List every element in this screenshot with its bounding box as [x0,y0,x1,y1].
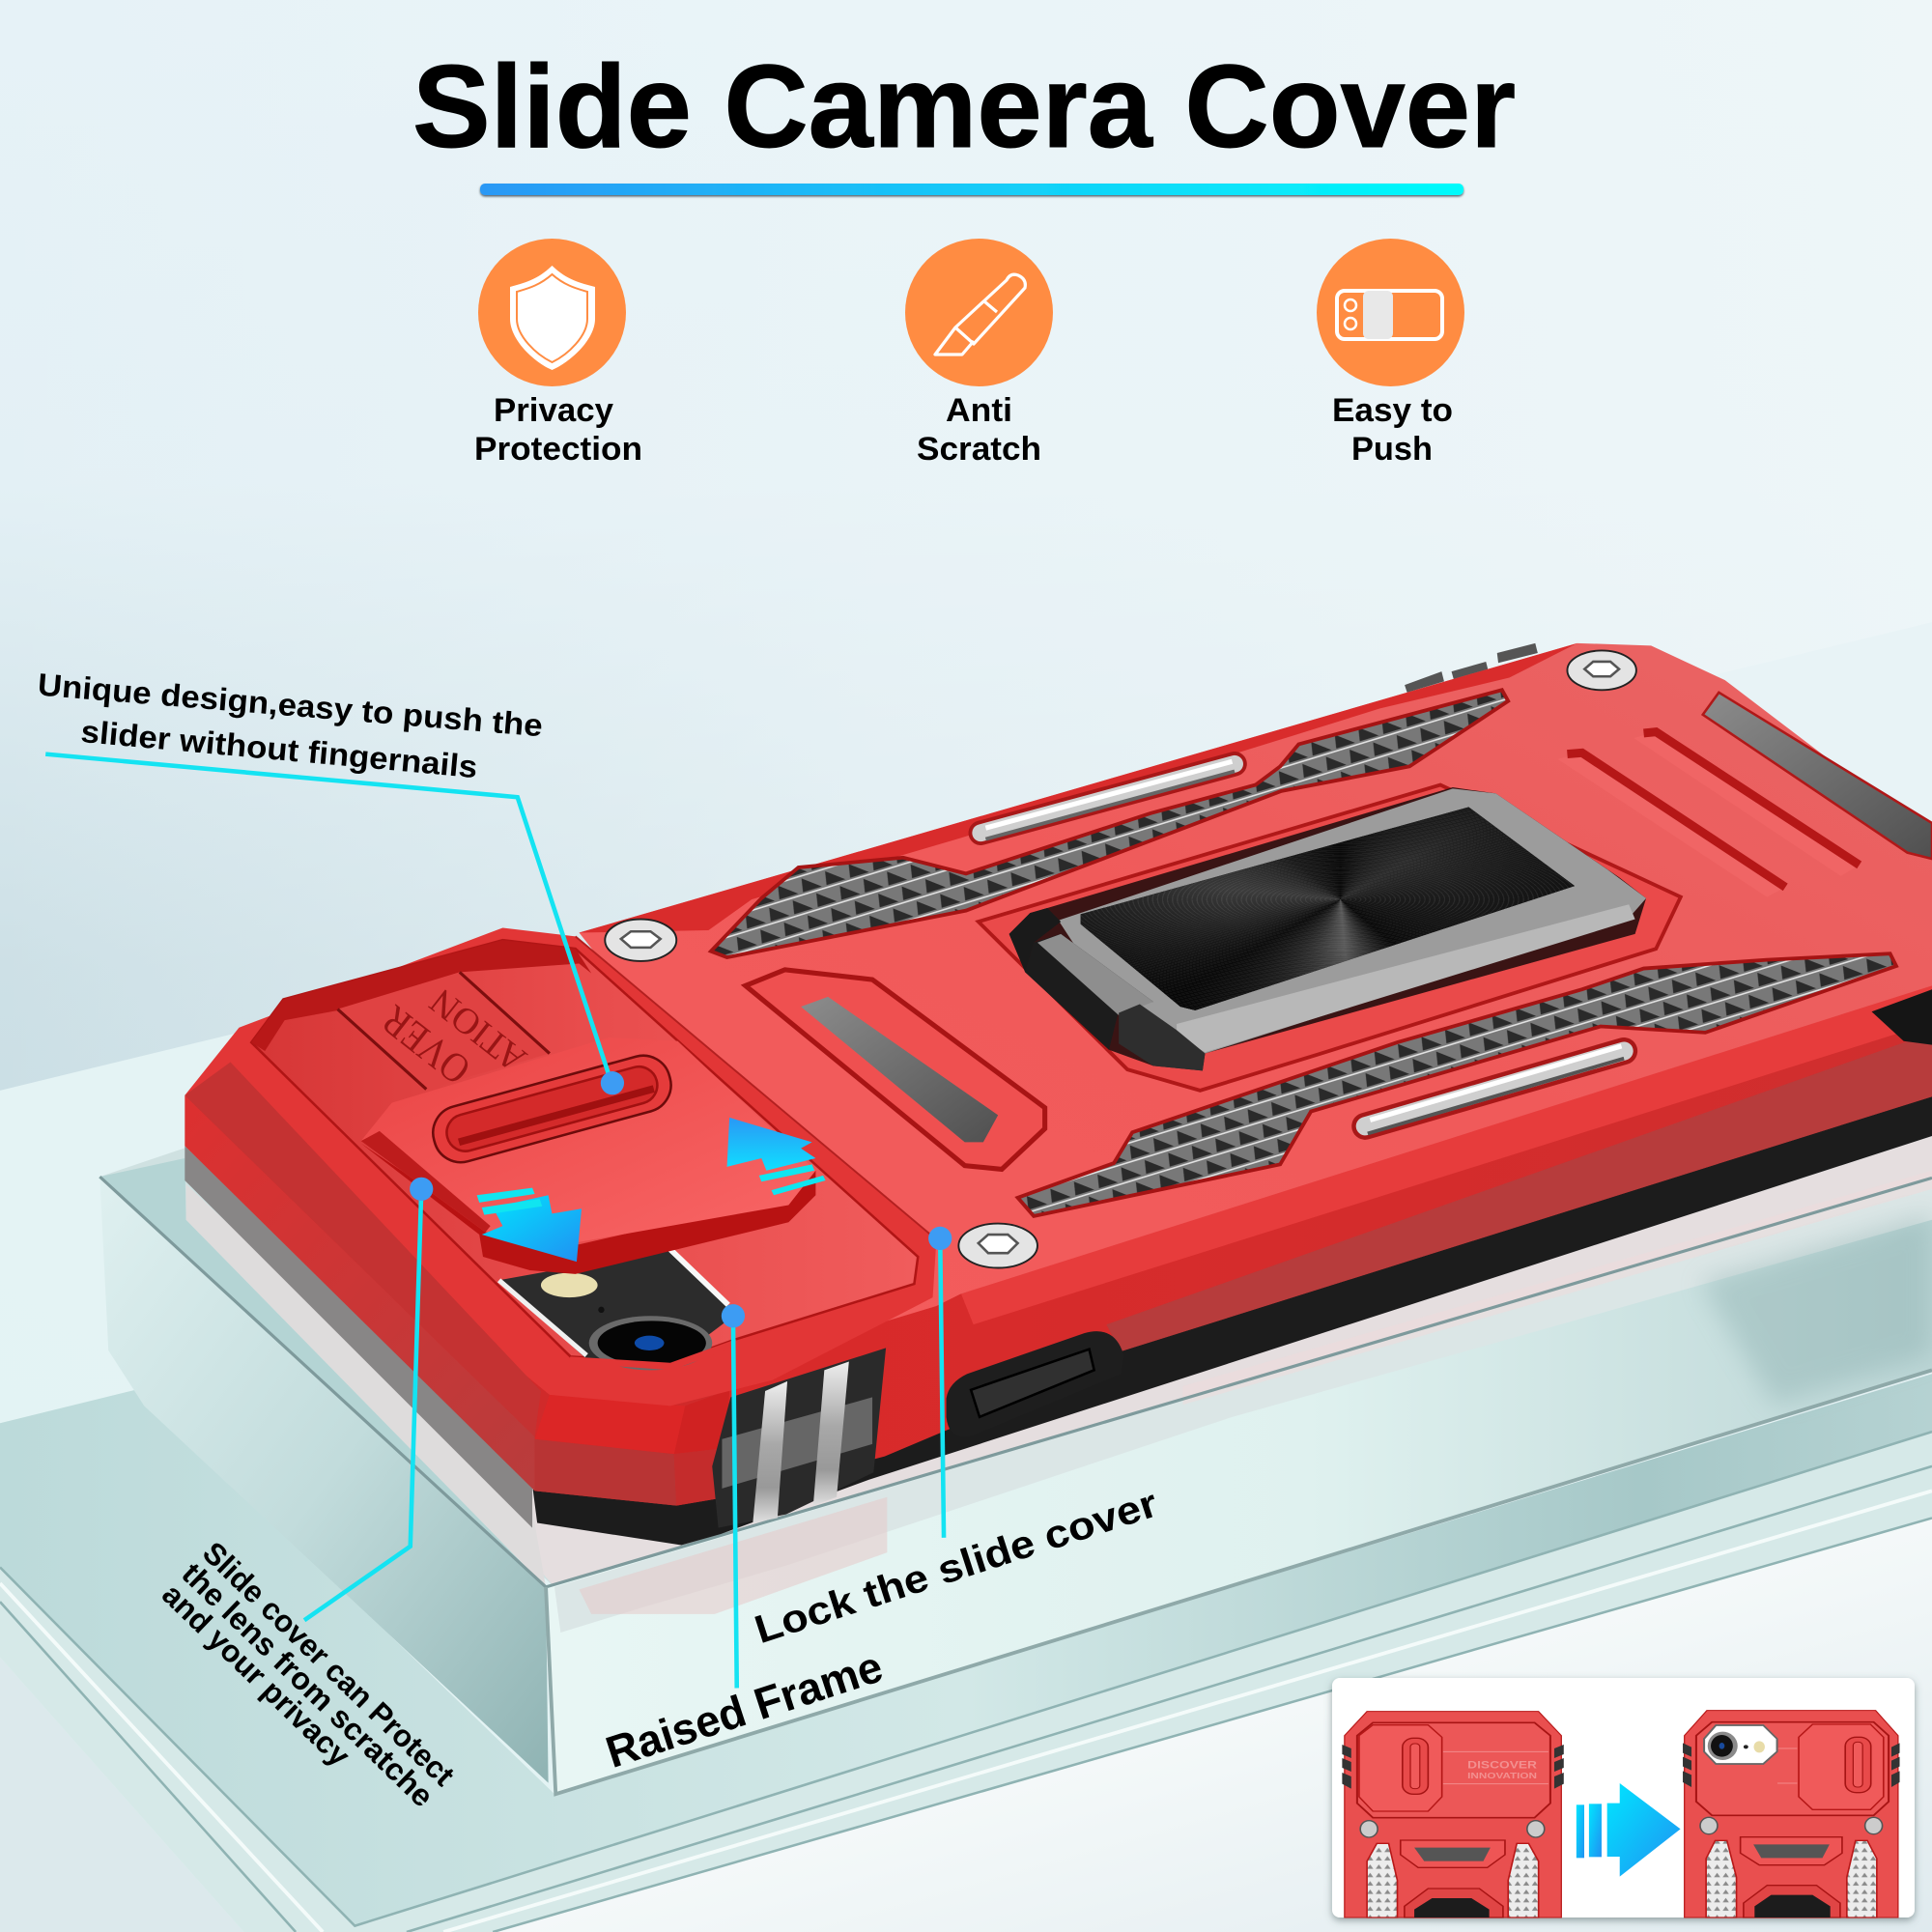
label: privacy protection: Privacy [494,392,613,429]
top right slots [1557,732,1860,897]
inset phone: cover closed [1342,1712,1564,1918]
label: easy to push: Easy to [1332,392,1453,429]
feature: privacy protection [474,239,642,468]
top right pad [1703,693,1932,859]
rear port block [712,1348,886,1528]
text: protect lens: Slide cover can Protect [196,1535,462,1793]
camera window [499,1249,739,1370]
frame slope band [185,1062,541,1436]
text: raised frame: Raised Frame [600,1641,889,1777]
callout dots [410,1071,952,1327]
underside: grey and black [185,1094,1932,1545]
upper edge shade [579,643,1577,933]
feature: anti scratch [905,239,1053,468]
darker side strip [1106,1033,1932,1351]
title: Slide Camera Cover [412,41,1516,172]
camera frame [185,927,936,1406]
side cutout [1871,989,1932,1045]
text: lock the slide cover: Lock the slide cover [750,1481,1163,1652]
ring holder [1009,787,1646,1070]
grip: upper [711,690,1508,957]
phone reflection strip [186,1184,546,1587]
text: push slider: slider without fingernails [79,714,479,784]
inset phone: cover open [1683,1711,1900,1918]
label: anti scratch: Scratch [917,431,1041,468]
inset phone: cover closed: DISCOVER [1467,1759,1537,1771]
leader: slider [45,754,610,1078]
feature: easy to push [1317,239,1464,468]
callout labels [37,667,1163,1813]
embossed tile: ATION [422,980,534,1080]
grip: lower [1018,953,1896,1216]
left slot [746,970,1045,1169]
top surface [579,643,1932,1321]
embossed tile [337,972,550,1094]
ring recess [979,784,1681,1091]
arrow: slide down [477,1188,582,1262]
lower edge highlight [961,985,1932,1324]
block front face [549,1178,1932,1794]
text: protect lens: the lens from scratche [175,1556,440,1813]
lower plate surface [0,1374,1932,1926]
scene: glass plates [0,622,1932,1932]
text: push slider: Unique design,easy to push the [37,667,544,743]
charging port [947,1331,1123,1436]
callout lines [45,754,944,1688]
icon: slider [1317,239,1464,386]
label: anti scratch: Anti [946,392,1012,429]
frame divider [576,936,936,1239]
leader: slide cover protect [304,1189,421,1620]
red backing [185,1095,933,1506]
text: push slider [37,667,544,784]
silver pill: upper [980,761,1235,839]
red left face [185,1095,535,1491]
label: easy to push: Push [1351,431,1433,468]
recess floor [251,940,918,1363]
red front corner [535,1390,729,1506]
embossed tile: OVER [373,996,479,1094]
arrow: direction [1577,1783,1681,1877]
text: protect lens: and your privacy [156,1577,357,1773]
screws [605,650,1636,1267]
icon: shield [478,239,626,386]
silver pill: lower [1365,1046,1624,1133]
slide cover [361,1037,815,1274]
block top surface [99,985,1932,1587]
inset: before and after [1342,1711,1900,1918]
phone case [185,643,1932,1545]
leader: lock [940,1238,944,1538]
arrow: slide up [727,1118,826,1195]
red side band [727,1005,1932,1497]
icon: craft knife [905,239,1053,386]
inset phone: cover closed: INNOVATION [1467,1772,1537,1780]
label: privacy protection: Protection [474,431,642,468]
inset card [1332,1678,1915,1918]
leader: raised frame [733,1316,737,1688]
recess wall [251,940,591,1051]
block left face [99,1177,549,1783]
side button tabs [1405,643,1538,693]
title underline [480,184,1463,195]
